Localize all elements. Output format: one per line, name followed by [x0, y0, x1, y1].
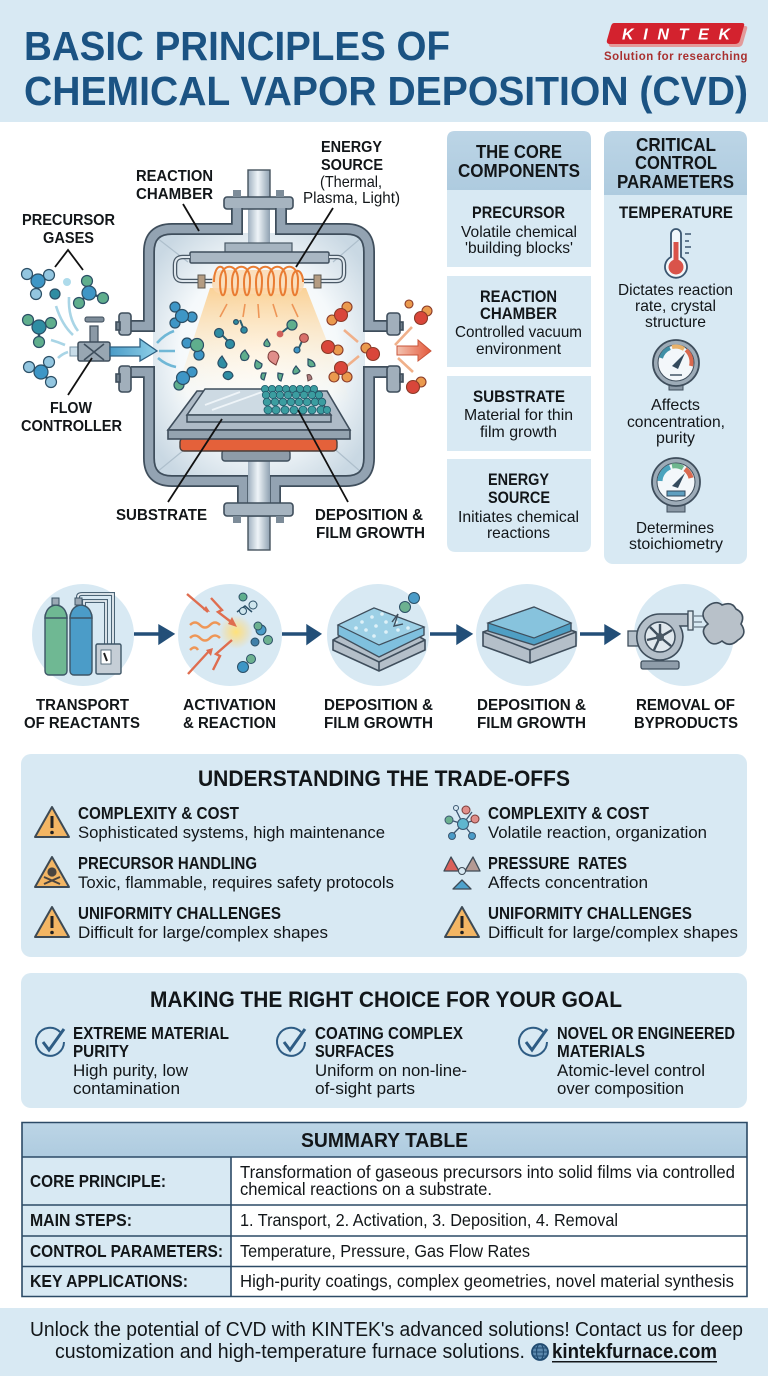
step 1 label: OF REACTANTS [24, 715, 140, 732]
icon: molecule network [445, 806, 479, 840]
label: energy source: ENERGY [321, 139, 382, 156]
energy source: heater bar and coil [175, 243, 344, 318]
icon: warning [35, 907, 69, 937]
component: substrate: film growth [480, 424, 557, 441]
component: substrate [464, 387, 573, 441]
goal: extreme material purity [73, 1023, 229, 1098]
goal: extreme material purity: contamination [73, 1079, 180, 1098]
icon: flow gauge [652, 458, 700, 512]
tradeoff: complexity and cost: COMPLEXITY & COST [78, 803, 239, 823]
label: energy source [303, 139, 400, 207]
component: energy source: Initiates chemical [458, 509, 579, 526]
label: energy source: SOURCE [321, 157, 383, 174]
icon: pressure gauge [653, 340, 699, 390]
panel: making the right choice [21, 973, 747, 1108]
row: main steps: MAIN STEPS: [30, 1210, 132, 1230]
goal: novel or engineered materials: NOVEL OR ENGINEERED [557, 1023, 735, 1043]
text: determines stoichiometry: Determines [636, 520, 714, 537]
header band [0, 0, 768, 122]
icon: warning [35, 807, 69, 837]
row: control parameters [30, 1241, 530, 1261]
label: precursor gases: GASES [43, 230, 94, 247]
label: flow controller: FLOW [50, 400, 93, 417]
tradeoff: uniformity challenges right: Difficult for large/complex shapes [488, 923, 738, 942]
component: reaction chamber: environment [476, 341, 562, 358]
text: affects concentration [627, 397, 725, 447]
icon: toxic hazard [35, 857, 69, 887]
component: energy source: reactions [487, 525, 550, 542]
label: deposition and film growth: FILM GROWTH [316, 525, 425, 542]
footer call to action: customization and high-temperature furnace solutions. [55, 1341, 525, 1363]
substrate stage and heater [168, 389, 350, 461]
label: energy source: (Thermal, [320, 174, 382, 191]
component: precursor [461, 203, 577, 257]
label: energy source: Plasma, Light) [303, 190, 400, 207]
icon: tri-colour pressure symbol [444, 857, 480, 889]
pointer lines [55, 204, 348, 502]
tradeoff: complexity and cost right: Volatile reaction, organization [488, 823, 707, 842]
step 4 label: FILM GROWTH [477, 715, 586, 732]
text: affects concentration: Affects [651, 397, 700, 414]
step 2 label [183, 697, 276, 732]
goal: extreme material purity: High purity, low [73, 1061, 189, 1080]
icon: globe [532, 1344, 548, 1360]
label: reaction chamber: REACTION [136, 168, 213, 185]
row: key applications: High-purity coatings, complex geometries, novel material synthesis [240, 1271, 734, 1291]
row: core principle: Transformation of gaseous precursors into solid films via controlled [240, 1162, 735, 1182]
title [24, 23, 748, 114]
component: precursor: 'building blocks' [465, 240, 573, 257]
goal: novel or engineered materials: Atomic-level control [557, 1061, 705, 1080]
outlet byproduct molecules [322, 300, 432, 394]
text: affects concentration: concentration, [627, 414, 725, 431]
summary table [22, 1122, 747, 1296]
component: energy source: ENERGY [488, 470, 550, 489]
step 3 label: DEPOSITION & [324, 697, 433, 714]
reacting fragments [214, 320, 315, 381]
goal: coating complex surfaces: SURFACES [315, 1041, 394, 1061]
side flanges [116, 313, 403, 392]
text: dictates reaction rate [618, 282, 733, 331]
step 5 icon: exhaust pump and cloud [628, 603, 744, 669]
row: core principle: chemical reactions on a substrate. [240, 1179, 492, 1199]
goal: coating complex surfaces [315, 1023, 467, 1098]
logo: KINTEK [604, 23, 748, 63]
tradeoff: uniformity challenges right [488, 903, 738, 942]
diagram: CVD reaction chamber [21, 139, 432, 550]
panel: the core components [447, 131, 591, 552]
footer call to action: Unlock the potential of CVD with KINTEK's advanced solutions! Contact us for deep [30, 1319, 743, 1341]
heading: the core components: COMPONENTS [458, 161, 580, 181]
icon: thermometer [665, 229, 691, 278]
tradeoff: pressure rates [488, 853, 648, 892]
step 5 label [634, 697, 738, 732]
outlet arrow [397, 340, 431, 361]
icon: check 2 [277, 1028, 305, 1056]
text: dictates reaction rate: structure [645, 314, 706, 331]
tradeoff: uniformity challenges: UNIFORMITY CHALLENGES [78, 903, 281, 923]
text: determines stoichiometry: stoichiometry [629, 536, 723, 553]
arrow 1 [134, 627, 172, 642]
logo: KINTEK: Solution for researching [604, 51, 748, 63]
row: control parameters: CONTROL PARAMETERS: [30, 1241, 223, 1261]
step 1 label [24, 697, 140, 732]
label: flow controller [21, 400, 122, 435]
heading: critical control parameters: CONTROL [635, 153, 717, 173]
step 5 label: REMOVAL OF [636, 697, 735, 714]
chamber interior [153, 233, 365, 477]
row: key applications: KEY APPLICATIONS: [30, 1271, 188, 1291]
goal: coating complex surfaces: Uniform on non-line- [315, 1061, 467, 1080]
text: dictates reaction rate: rate, crystal [635, 298, 716, 315]
row: control parameters: Temperature, Pressure, Gas Flow Rates [240, 1241, 530, 1261]
step 4 label: DEPOSITION & [477, 697, 586, 714]
step 3 label [324, 697, 433, 732]
flow controller valve [70, 317, 110, 361]
label: deposition and film growth [315, 507, 425, 542]
tradeoff: precursor handling: Toxic, flammable, requires safety protocols [78, 873, 394, 892]
heading: the core components: THE CORE [476, 142, 562, 162]
tradeoff: pressure rates: Affects concentration [488, 873, 648, 892]
icon: check 3 [519, 1028, 547, 1056]
footer band [0, 1308, 768, 1376]
component: reaction chamber: Controlled vacuum [455, 324, 582, 341]
component: energy source [458, 470, 579, 542]
component: substrate: SUBSTRATE [473, 387, 565, 406]
tradeoff: complexity and cost right: COMPLEXITY & COST [488, 803, 649, 823]
heading: trade-offs: UNDERSTANDING THE TRADE-OFFS [198, 766, 570, 791]
step circles [32, 584, 734, 686]
arrow 3 [430, 627, 470, 642]
tradeoff: uniformity challenges right: UNIFORMITY CHALLENGES [488, 903, 692, 923]
step 4 label [477, 697, 586, 732]
deposited film [261, 385, 331, 414]
bottom pipe and flange [224, 455, 293, 550]
tradeoff: complexity and cost right [488, 803, 707, 842]
row: core principle [30, 1162, 735, 1199]
inlet arrow [110, 339, 157, 361]
inflow molecules [157, 302, 204, 390]
logo: KINTEK: KINTEK [622, 26, 731, 44]
step 3 icon: deposition block [333, 592, 425, 671]
parameter label: temperature: TEMPERATURE [619, 203, 733, 222]
label: substrate: SUBSTRATE [116, 507, 207, 524]
panel: understanding the trade-offs [21, 754, 747, 957]
icon: check 1 [36, 1028, 64, 1056]
component: reaction chamber [455, 287, 582, 358]
label: precursor gases [22, 212, 115, 247]
website link: kintekfurnace.com [552, 1341, 717, 1363]
step 3 label: FILM GROWTH [324, 715, 433, 732]
arrow 4 [580, 627, 618, 642]
goal: extreme material purity: EXTREME MATERIAL [73, 1023, 229, 1043]
component: precursor: Volatile chemical [461, 224, 577, 241]
step 2 label: ACTIVATION [183, 697, 276, 714]
chamber walls [131, 208, 388, 503]
goal: coating complex surfaces: of-sight parts [315, 1079, 415, 1098]
step 2 label: & REACTION [183, 715, 276, 732]
goal: novel or engineered materials: MATERIALS [557, 1041, 645, 1061]
goal: novel or engineered materials: over composition [557, 1079, 684, 1098]
heading: critical control parameters: CRITICAL [636, 135, 716, 155]
tradeoff: uniformity challenges: Difficult for large/complex shapes [78, 923, 328, 942]
heading: right choice: MAKING THE RIGHT CHOICE FOR YOUR GOAL [150, 987, 622, 1012]
text: dictates reaction rate: Dictates reaction [618, 282, 733, 299]
top pipe and flange [224, 170, 293, 244]
step 4 icon: grown film [483, 607, 576, 663]
arrow 2 [282, 627, 319, 642]
row: core principle: CORE PRINCIPLE: [30, 1171, 166, 1191]
tradeoff: uniformity challenges [78, 903, 328, 942]
component: energy source: SOURCE [488, 488, 550, 507]
goal: coating complex surfaces: COATING COMPLEX [315, 1023, 463, 1043]
tradeoff: complexity and cost: Sophisticated systems, high maintenance [78, 823, 385, 842]
heading: the core components [458, 142, 580, 181]
row: key applications [30, 1271, 734, 1291]
tradeoff: precursor handling: PRECURSOR HANDLING [78, 853, 257, 873]
step 1 icon: gas cylinders [45, 594, 121, 675]
label: reaction chamber: CHAMBER [136, 186, 213, 203]
heading: critical control parameters [617, 135, 734, 192]
component: reaction chamber: CHAMBER [480, 304, 557, 323]
step 1 label: TRANSPORT [36, 697, 129, 714]
heading: critical control parameters: PARAMETERS [617, 172, 734, 192]
goal: novel or engineered materials [557, 1023, 735, 1098]
text: affects concentration: purity [656, 430, 695, 447]
title: BASIC PRINCIPLES OF [24, 23, 450, 69]
label: reaction chamber [136, 168, 213, 203]
step 5 label: BYPRODUCTS [634, 715, 738, 732]
goal: extreme material purity: PURITY [73, 1041, 129, 1061]
label: deposition and film growth: DEPOSITION & [315, 507, 423, 524]
component: substrate: Material for thin [464, 407, 573, 424]
title: CHEMICAL VAPOR DEPOSITION (CVD) [24, 68, 748, 114]
precursor gas molecules [22, 268, 108, 388]
component: reaction chamber: REACTION [480, 287, 557, 306]
tradeoff: complexity and cost [78, 803, 385, 842]
label: flow controller: CONTROLLER [21, 418, 122, 435]
process flow steps [24, 584, 744, 732]
label: precursor gases: PRECURSOR [22, 212, 115, 229]
row: main steps: 1. Transport, 2. Activation, 3. Deposition, 4. Removal [240, 1210, 618, 1230]
table heading: SUMMARY TABLE [301, 1130, 468, 1152]
footer call to action [30, 1319, 743, 1363]
icon: warning [445, 907, 479, 937]
tradeoff: precursor handling [78, 853, 394, 892]
row: main steps [30, 1210, 618, 1230]
text: determines stoichiometry [629, 520, 723, 553]
panel: critical control parameters [604, 131, 747, 564]
tradeoff: pressure rates: PRESSURE RATES [488, 853, 627, 873]
step 2 icon: activation and reaction [187, 593, 272, 674]
component: precursor: PRECURSOR [472, 203, 565, 222]
